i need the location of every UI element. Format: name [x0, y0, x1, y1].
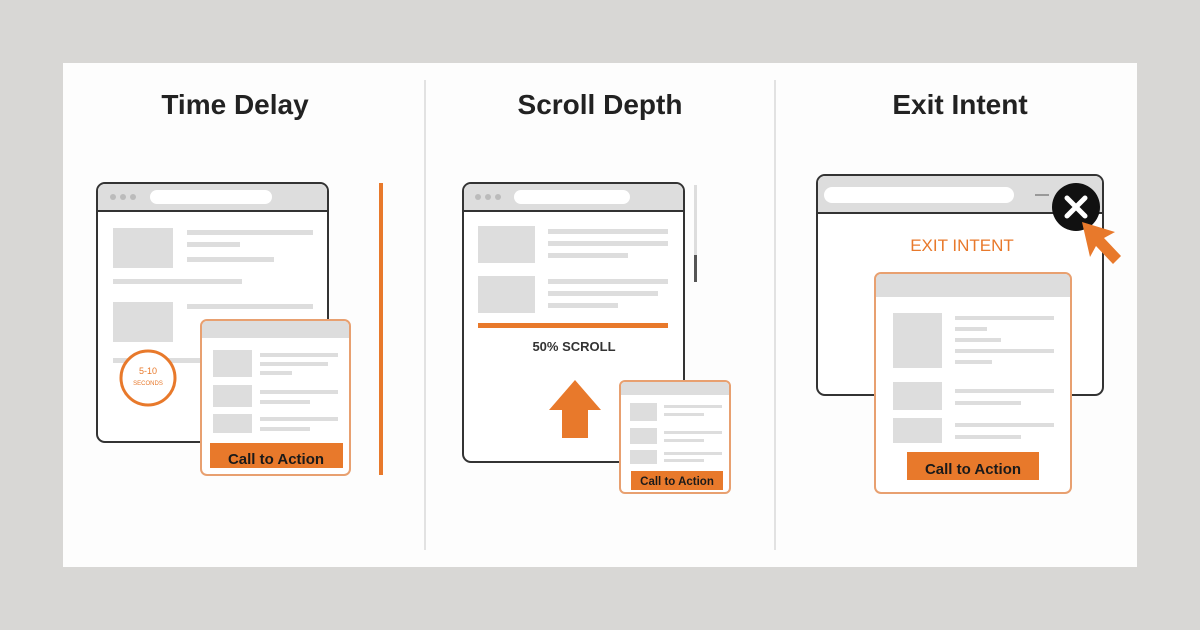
timeline bar [379, 183, 383, 475]
button: Call to Action [631, 471, 723, 490]
popup with call to action: Call to Action [228, 451, 324, 468]
heading: Time Delay: Time Delay [161, 89, 309, 120]
icon: close button [1052, 183, 1100, 231]
button: Call to Action [210, 443, 343, 468]
browser window [817, 175, 1103, 395]
popup with call to action: Call to Action [640, 476, 714, 488]
scroll marker [478, 323, 668, 328]
icon: timer 5-10 seconds [121, 351, 175, 405]
popup with call to action [201, 320, 350, 475]
icon: up arrow [549, 380, 601, 438]
card [63, 63, 1137, 567]
panel: exit intent [817, 89, 1121, 493]
scrollbar [694, 185, 697, 282]
icon: timer 5-10 seconds: 5-10 [139, 366, 157, 376]
browser window [97, 183, 328, 442]
button: Call to Action [907, 452, 1039, 480]
panel: scroll depth [463, 89, 730, 493]
icon: cursor [1082, 222, 1121, 264]
popup with call to action [620, 381, 730, 493]
label: exit intent: EXIT INTENT [910, 236, 1014, 255]
icon: timer 5-10 seconds: SECONDS [133, 381, 163, 387]
popup with call to action: Call to Action [925, 461, 1021, 478]
label: 50% scroll: 50% SCROLL [532, 339, 616, 354]
popup with call to action [875, 273, 1071, 493]
panel: time delay [97, 89, 383, 475]
heading: Exit Intent: Exit Intent [892, 89, 1028, 120]
browser window [463, 183, 684, 462]
heading: Scroll Depth: Scroll Depth [518, 89, 682, 120]
